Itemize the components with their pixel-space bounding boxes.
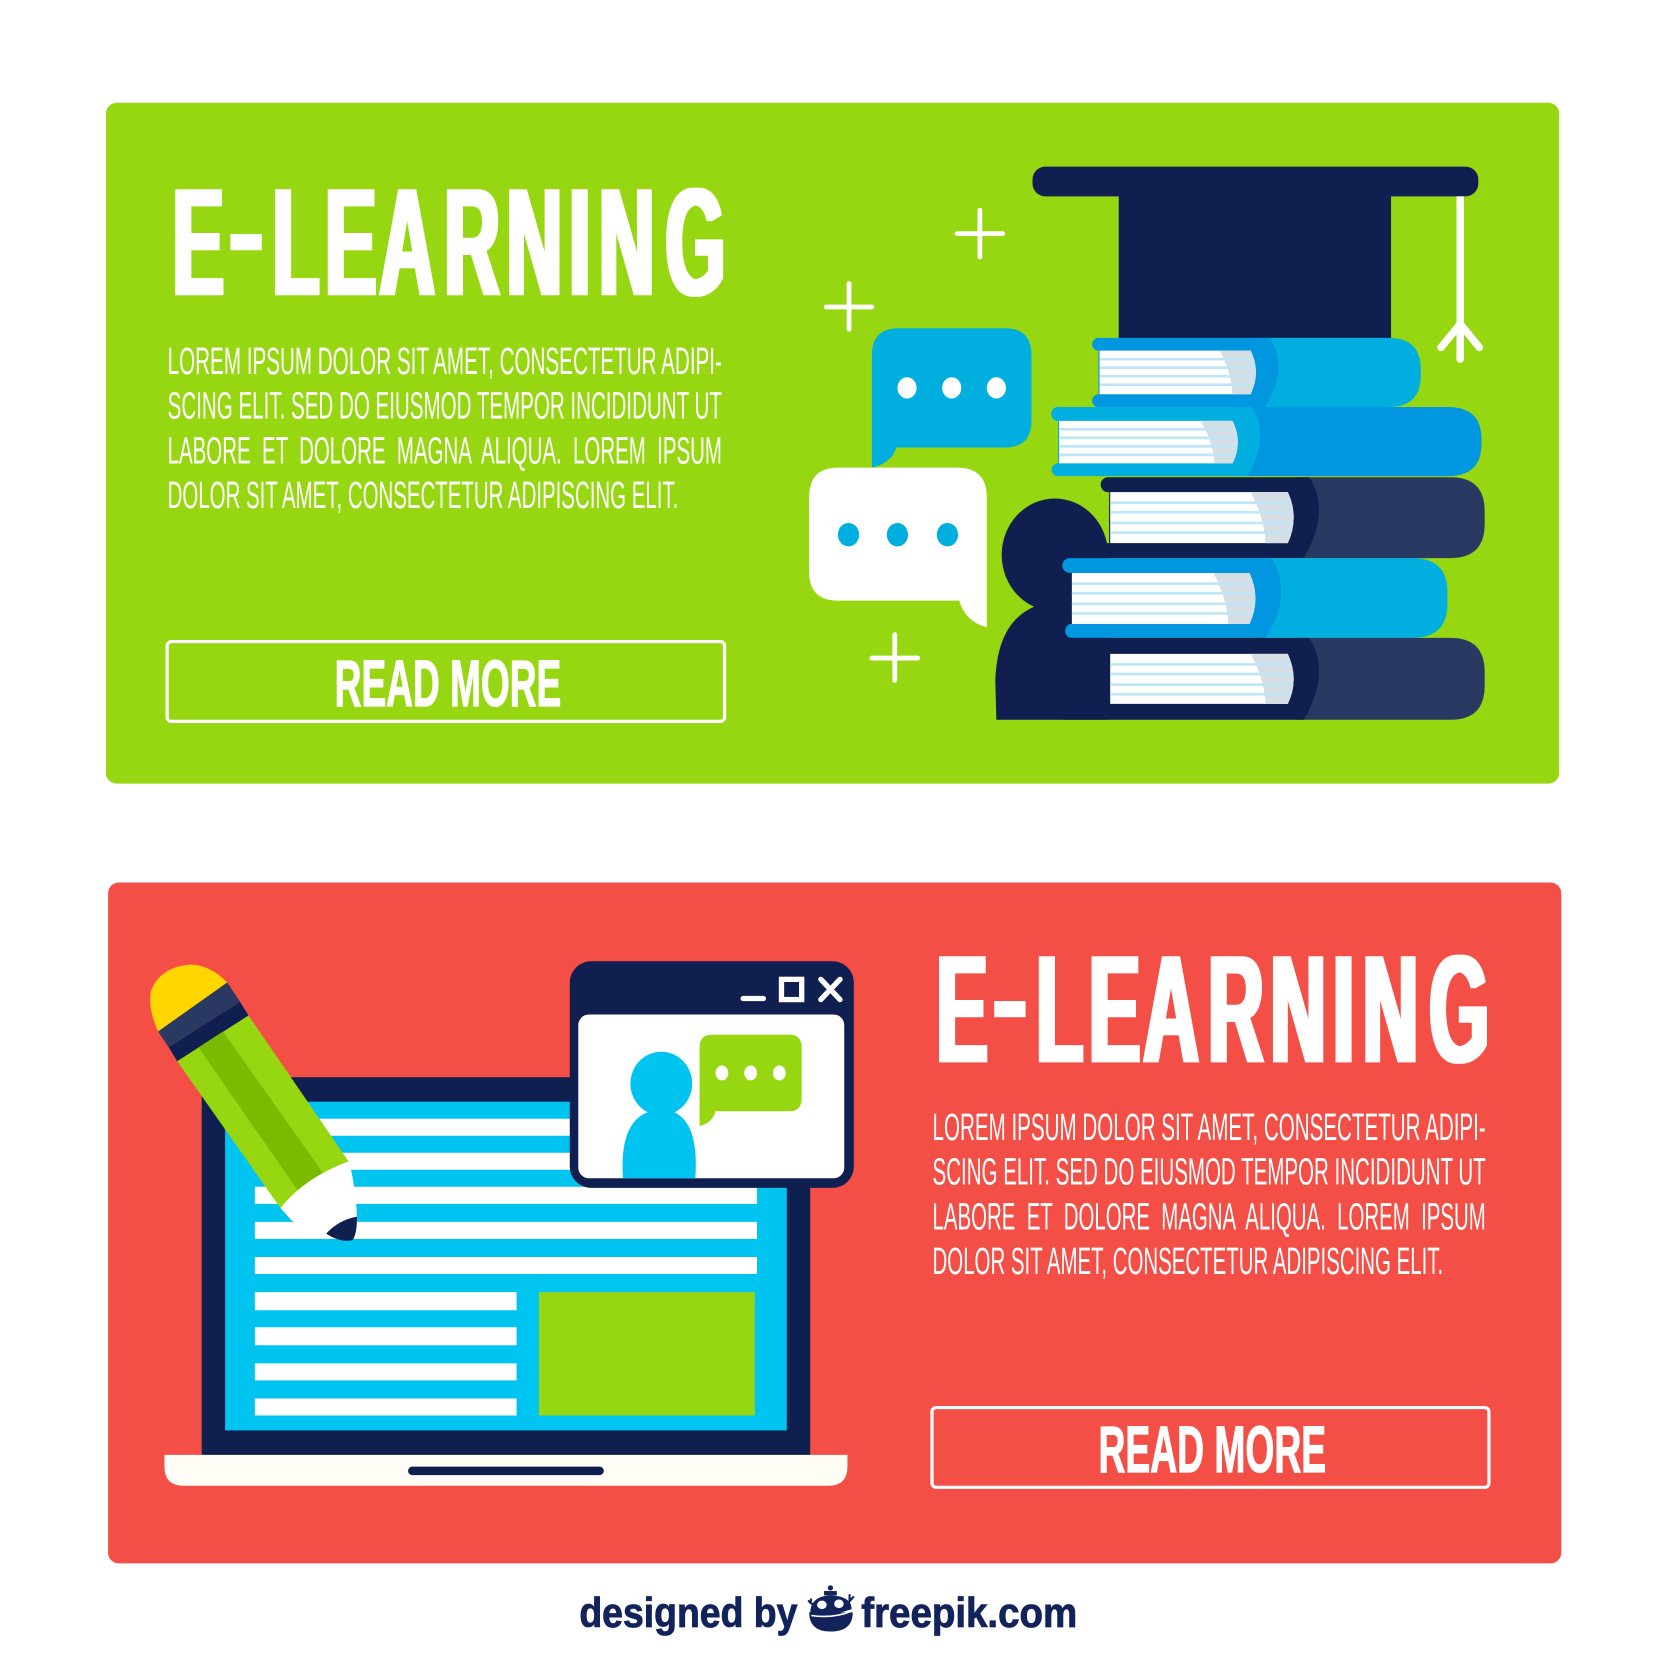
heading: -: [1001, 941, 1019, 1060]
panel: red e-learning banner: [108, 883, 1561, 1563]
footer: designed by freepik.com: [579, 1585, 1077, 1636]
book 2: [1051, 407, 1481, 476]
book 3: [1095, 477, 1485, 558]
body text: DOLOR SIT AMET, CONSECTETUR ADIPISCING ELIT.: [168, 474, 678, 517]
body text: LABORE ET DOLORE MAGNA ALIQUA. LOREM IPSUM: [168, 429, 722, 472]
footer: designed by freepik.com: freepik.com: [861, 1589, 1077, 1636]
heading: LEARNING: [272, 156, 725, 328]
footer: designed by freepik.com: designed by: [579, 1589, 797, 1636]
window controls: [743, 979, 840, 1000]
button: read more: READ MORE: [335, 646, 561, 720]
icon: plus signs: [826, 210, 1003, 680]
book 5: [1063, 638, 1485, 720]
panel: green e-learning banner: [106, 103, 1559, 784]
heading: E: [173, 156, 224, 328]
icon: pencil: [150, 964, 357, 1241]
heading: -: [237, 174, 255, 293]
heading: LEARNING: [1036, 923, 1489, 1095]
speech bubble in video: [700, 1035, 802, 1126]
icon: video window: [570, 961, 854, 1188]
icon: laptop: [164, 1077, 847, 1486]
person in video: [623, 1052, 696, 1178]
body text: LOREM IPSUM DOLOR SIT AMET, CONSECTETUR ADIPI-: [168, 340, 722, 383]
book 4: [1062, 558, 1447, 638]
icon: stack of books: [1051, 338, 1485, 720]
body text: [933, 1106, 1486, 1283]
icon: graduation cap: [1033, 167, 1479, 359]
button: read more: [932, 1408, 1489, 1487]
body text: SCING ELIT. SED DO EIUSMOD TEMPOR INCIDIDUNT UT: [168, 385, 722, 428]
button: read more: [167, 642, 725, 721]
icon: freepik logo: [808, 1585, 854, 1631]
icon: blue speech bubble: [872, 328, 1031, 468]
body text: [168, 340, 722, 517]
heading: E: [936, 923, 988, 1095]
book 1: [1092, 338, 1421, 407]
button: read more: READ MORE: [1098, 1412, 1326, 1486]
icon: person silhouette: [995, 499, 1108, 720]
icon: white speech bubble: [809, 468, 987, 627]
